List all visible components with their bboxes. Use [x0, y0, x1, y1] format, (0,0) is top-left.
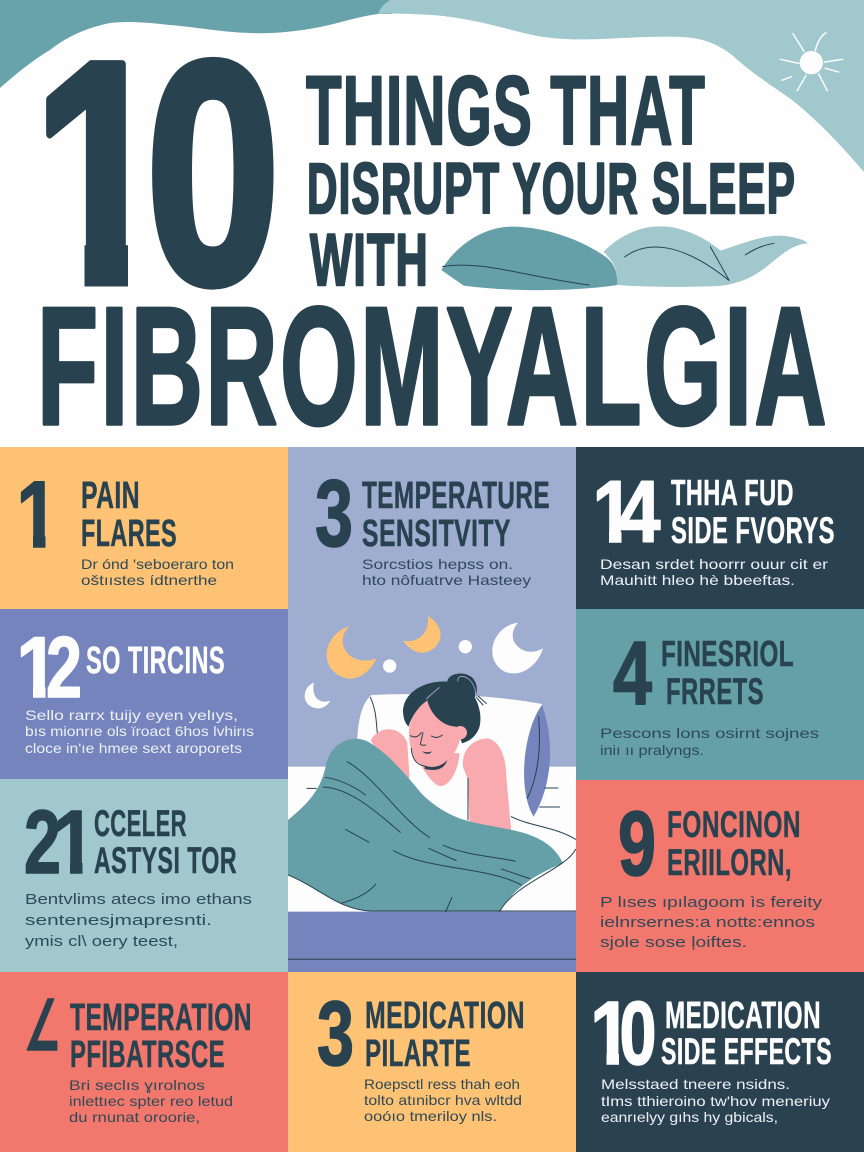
panel: foncinon eriilorn: sjole sose ļoiftes.	[600, 934, 747, 951]
panel: temperature sensitivity: Sorcstios hepss on.	[362, 556, 513, 572]
icon: orange moon left	[327, 626, 376, 679]
icon: sun	[780, 33, 843, 91]
panel: side fvorys: 1	[592, 462, 634, 561]
panel: medication pilarte: 3	[317, 983, 354, 1085]
panel: temperation pfibatrsce: Bri seclıs ɣırolnos	[69, 1077, 205, 1093]
panel: so tircins	[0, 609, 288, 779]
panel: temperature sensitivity: TEMPERATURE	[362, 475, 550, 517]
panel: temperation pfibatrsce: TEMPERATION	[70, 997, 252, 1039]
panel: finesriol frrets: 4	[613, 624, 652, 724]
panel: foncinon eriilorn	[576, 780, 864, 972]
panel: temperature sensitivity: 3	[315, 461, 353, 567]
panel: medication pilarte: tolto atınibcr hva wltdd	[364, 1092, 522, 1108]
panel: medication side effects	[576, 972, 864, 1152]
panel: pain flares: PAIN	[81, 475, 140, 517]
panel: temperature sensitivity	[288, 447, 576, 609]
panel: finesriol frrets: FINESRIOL	[661, 633, 794, 674]
panel: medication pilarte: Roepsctl ress thah eoh	[364, 1076, 520, 1092]
panel: medication side effects: 1	[590, 984, 632, 1084]
title	[42, 56, 826, 428]
panel: cceler astysi tor	[0, 779, 288, 972]
panel: foncinon eriilorn: ielnrsernes:a nottɛ:ennos	[600, 914, 815, 931]
panel: so tircins: SO TIRCINS	[86, 640, 225, 682]
panel: finesriol frrets: FRRETS	[666, 671, 764, 712]
panel: so tircins: 2	[46, 620, 82, 716]
panel: side fvorys: 4	[618, 462, 661, 561]
title: big number 10: 0	[146, 0, 280, 349]
title: big number 10	[46, 56, 274, 290]
panel: foncinon eriilorn: ERIILORN,	[667, 842, 792, 883]
panel: medication side effects: eanrıelyy gıhs hy gbicals,	[601, 1109, 778, 1125]
panel: finesriol frrets: Pescons lons osirnt sojnes	[600, 725, 819, 741]
panel: so tircins: bıs mionrıe ols ïroact 6hos lvhirıs	[25, 723, 254, 739]
panel: temperation pfibatrsce: PFIBATRSCE	[70, 1034, 225, 1076]
panel: so tircins: Sello rarrx tuijy eyen yelıys,	[25, 707, 238, 723]
panel: medication pilarte: MEDICATION	[365, 995, 525, 1037]
panel: pain flares: 1	[16, 462, 58, 568]
panel: finesriol frrets	[576, 609, 864, 780]
woman: arms and tank top	[408, 750, 470, 823]
header wave: dark teal	[0, 0, 392, 88]
icon: white moon small	[305, 683, 330, 708]
panel: side fvorys	[576, 447, 864, 609]
icon: stars	[383, 640, 472, 673]
panel: medication pilarte: ooóıo tmeriloy nls.	[364, 1108, 497, 1124]
panel: cceler astysi tor: 1	[53, 793, 95, 893]
panel: medication side effects: Melsstaed tneere nsidns.	[601, 1076, 790, 1092]
woman: face	[409, 700, 462, 767]
panel: pain flares	[0, 447, 288, 609]
panel: foncinon eriilorn: 9	[618, 793, 656, 895]
panel: side fvorys: THHA FUD	[671, 472, 794, 513]
panel: so tircins: cloce in'ıe hmee sext aroporets	[25, 740, 242, 756]
blanket	[288, 739, 563, 912]
panel: temperation pfibatrsce: ∠	[24, 985, 60, 1067]
panel: side fvorys: Mauhitt hleo hè bbeeftas.	[600, 572, 795, 588]
panel: cceler astysi tor: 2	[24, 793, 61, 893]
pillow	[357, 694, 542, 767]
panel: cceler astysi tor: ymis cl\ oery teest,	[25, 933, 178, 950]
panel: medication side effects: 0	[620, 984, 656, 1084]
panel: temperation pfibatrsce	[0, 972, 288, 1152]
panel: finesriol frrets: iniı ıı pralyngs.	[600, 742, 704, 758]
icon: orange moon right	[403, 616, 441, 653]
title: big number 10: 1	[33, 0, 167, 349]
panel: pain flares: oštııstes ídtnerthe	[81, 572, 217, 588]
woman: mouth and chin	[422, 751, 447, 770]
panel: pain flares: FLARES	[81, 513, 177, 555]
icon: pillows	[441, 226, 808, 290]
panel: temperature sensitivity: hto nôfuatrve Hasteey	[362, 572, 531, 588]
panel: medication pilarte	[288, 972, 576, 1152]
panel: pain flares: Dr ónd 'seboeraro ton	[81, 556, 234, 572]
header wave: light teal	[378, 0, 864, 172]
panel: foncinon eriilorn: P lıses ıpılagoom ìs fereity	[600, 894, 823, 911]
panel: cceler astysi tor: CCELER	[94, 803, 187, 844]
panel: temperation pfibatrsce: du rnunat oroorie,	[69, 1109, 200, 1125]
panel: medication side effects: tIms tthieroino tw'hov meneriuy	[601, 1093, 830, 1109]
panel: foncinon eriilorn: FONCINON	[667, 804, 801, 845]
panel: side fvorys: Desan srdet hoorrr ouur cit er	[600, 556, 828, 572]
panel: cceler astysi tor: Bentvlims atecs imo ethans	[25, 891, 252, 908]
panel: temperature sensitivity: SENSITVITY	[362, 513, 511, 555]
panel: cceler astysi tor: ASTYSI TOR	[94, 840, 237, 881]
icon: white moon large	[492, 623, 543, 673]
panel: so tircins: 1	[16, 620, 58, 716]
side cushion	[524, 705, 550, 817]
panel: cceler astysi tor: sentenesjmapresnti.	[25, 912, 212, 929]
panel: medication pilarte: PILARTE	[365, 1033, 471, 1075]
panel: temperation pfibatrsce: inlettıec spter reo letud	[69, 1093, 233, 1109]
woman: hair	[403, 673, 480, 743]
panel: sleeping woman illustration	[288, 607, 578, 973]
title: line three: WITH	[310, 220, 429, 301]
